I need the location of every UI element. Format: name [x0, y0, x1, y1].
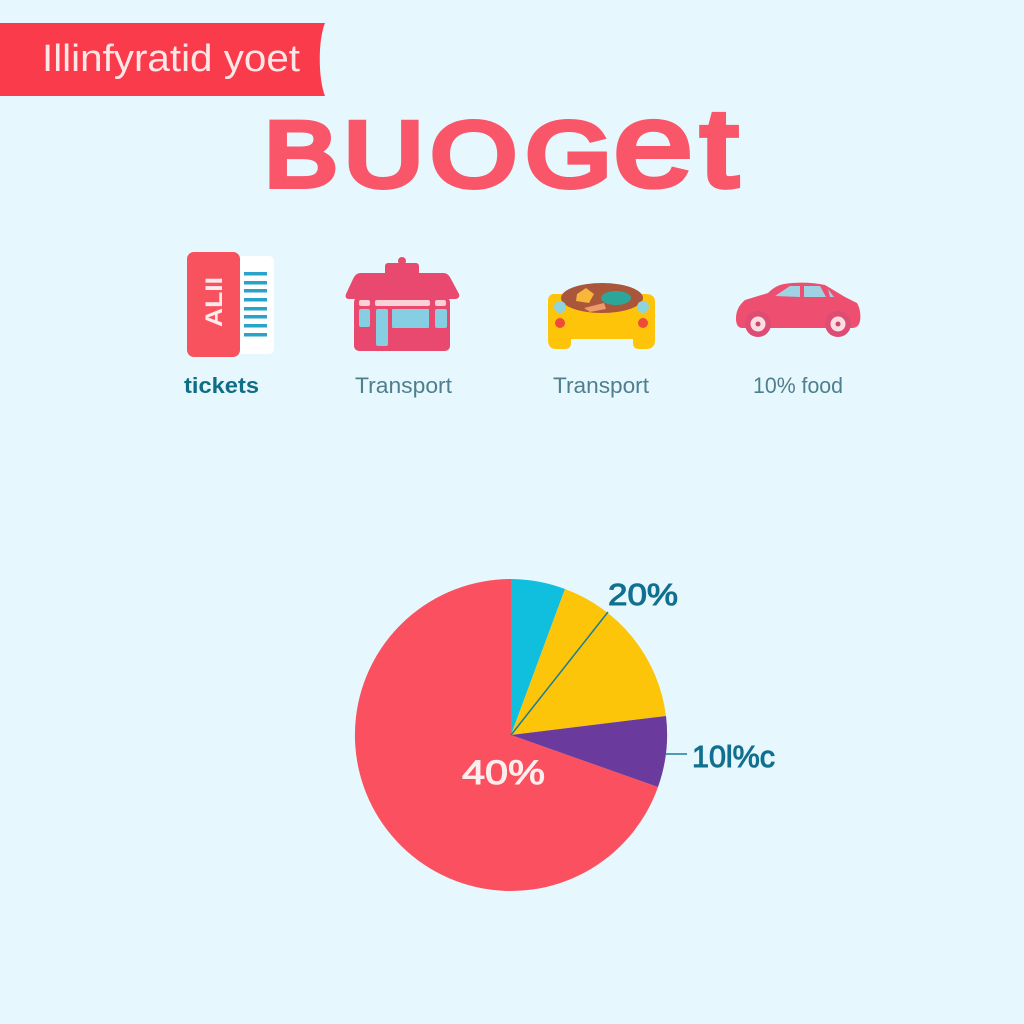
banner: Illinfyratid yoet [42, 38, 300, 80]
title: U [344, 103, 424, 206]
title: B [264, 103, 338, 206]
icon: ticket [187, 252, 274, 357]
leader line: 10% [666, 753, 687, 755]
slice: red 40% [355, 579, 658, 891]
title: e [613, 78, 693, 212]
banner [0, 23, 325, 96]
label: 10% food: 10% food [753, 373, 843, 398]
slice: blue [511, 579, 565, 735]
pie label: 20%: 20% [608, 577, 678, 612]
icon: yellow vehicle with food [548, 283, 655, 349]
title: G [526, 103, 611, 206]
slice: purple 10% [511, 716, 667, 787]
slice: yellow 20% [511, 589, 666, 735]
icon: shop [346, 257, 459, 351]
label: tickets: tickets [184, 373, 259, 398]
label: transport 1: Transport [355, 373, 452, 398]
icon: car [736, 283, 860, 337]
icon: ticket: ALII [201, 277, 228, 327]
pie label: 10%: 10l%c [692, 739, 775, 774]
pie chart [355, 579, 667, 891]
title: t [701, 86, 737, 210]
pie label: 40%: 40% [462, 754, 545, 792]
leader line: 20% [511, 612, 608, 735]
title: O [431, 103, 517, 206]
label: transport 2: Transport [553, 373, 649, 398]
